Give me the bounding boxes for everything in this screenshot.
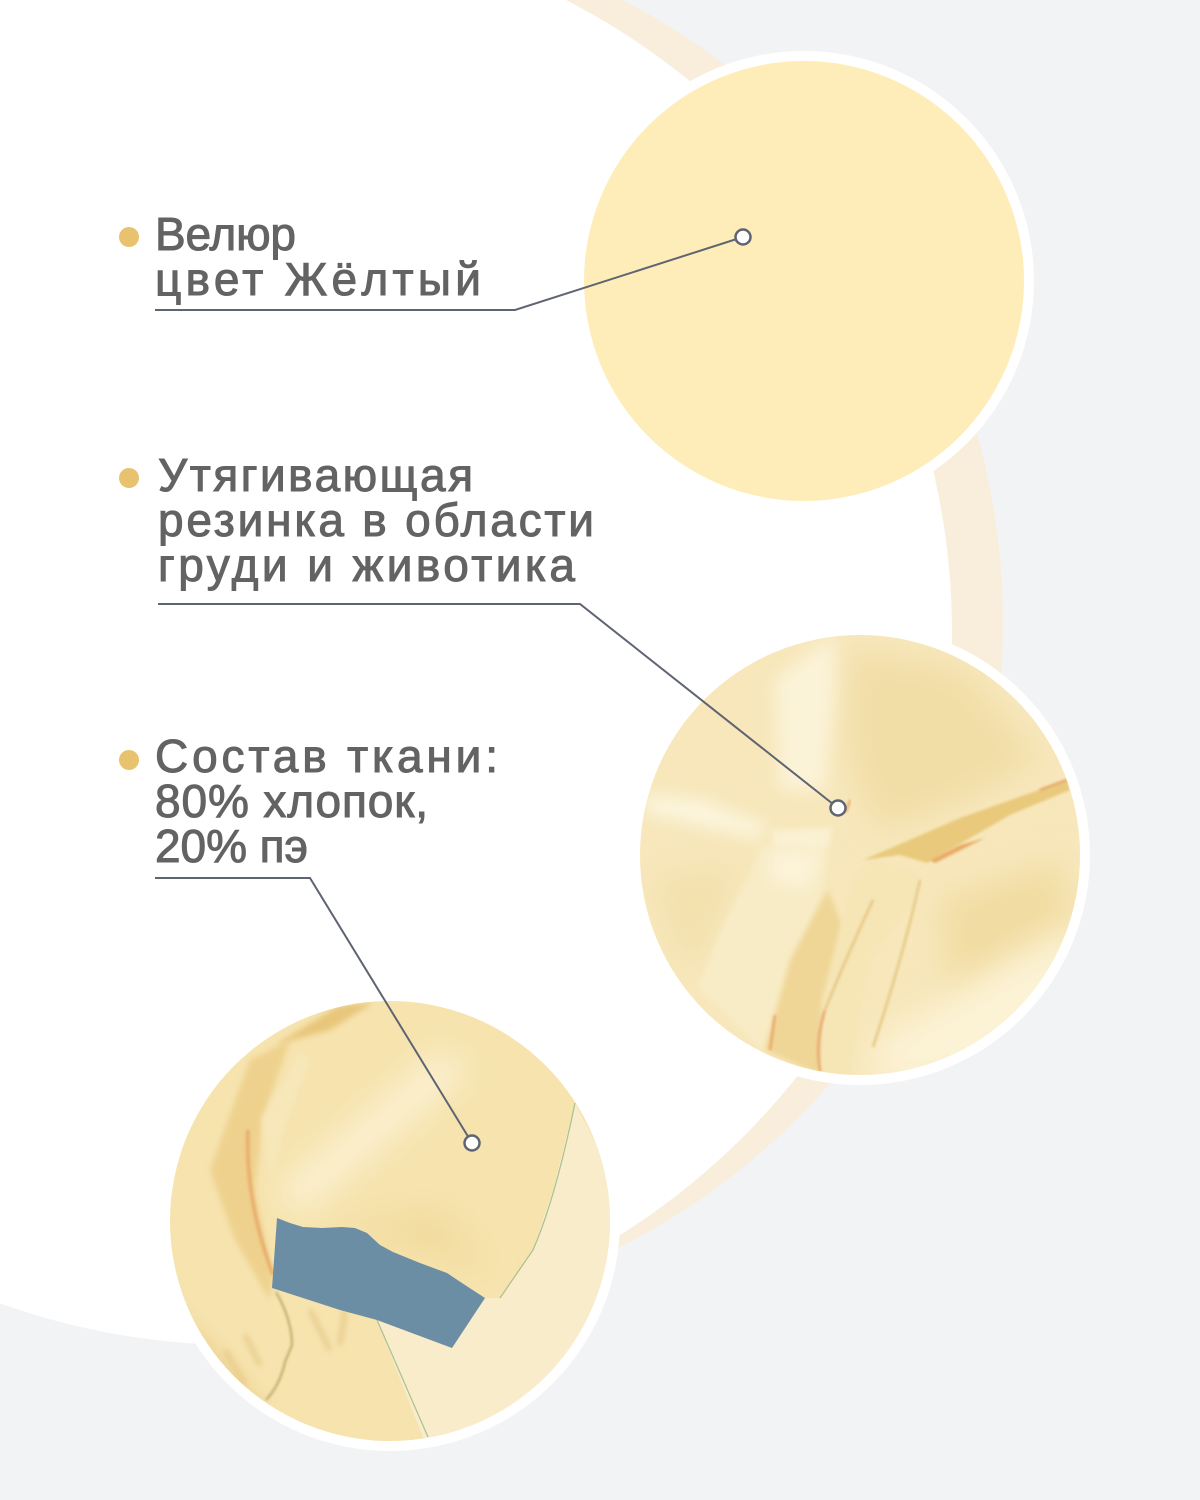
- chest elastic fabric photo: [630, 625, 1090, 1085]
- leader line: [155, 237, 743, 310]
- label line 3: 20% пэ: [155, 820, 308, 872]
- label line 3: груди и животика: [158, 539, 575, 591]
- label line 2: цвет Жёлтый: [155, 253, 481, 305]
- callout: velour colour: [119, 208, 750, 310]
- label line 1: Утягивающая: [158, 449, 473, 501]
- label line 1: Велюр: [155, 208, 296, 260]
- callout: elastic: [119, 449, 846, 816]
- bullet: [119, 750, 139, 770]
- marker dot: [830, 800, 846, 816]
- bullet: [119, 227, 139, 247]
- decorative ring: [0, 0, 1003, 1323]
- large white circle: [0, 0, 952, 1345]
- label line 2: 80% хлопок,: [155, 775, 428, 827]
- leader line: [155, 878, 472, 1143]
- plain yellow fabric swatch: [574, 51, 1034, 511]
- leader line: [158, 604, 838, 808]
- callout: fabric composition: [119, 730, 498, 1150]
- label line 1: Состав ткани:: [155, 730, 498, 782]
- label line 2: резинка в области: [158, 494, 594, 546]
- bullet: [119, 468, 139, 488]
- marker dot: [736, 230, 750, 244]
- sleeve cuff fabric photo: [160, 990, 620, 1451]
- marker dot: [464, 1136, 480, 1150]
